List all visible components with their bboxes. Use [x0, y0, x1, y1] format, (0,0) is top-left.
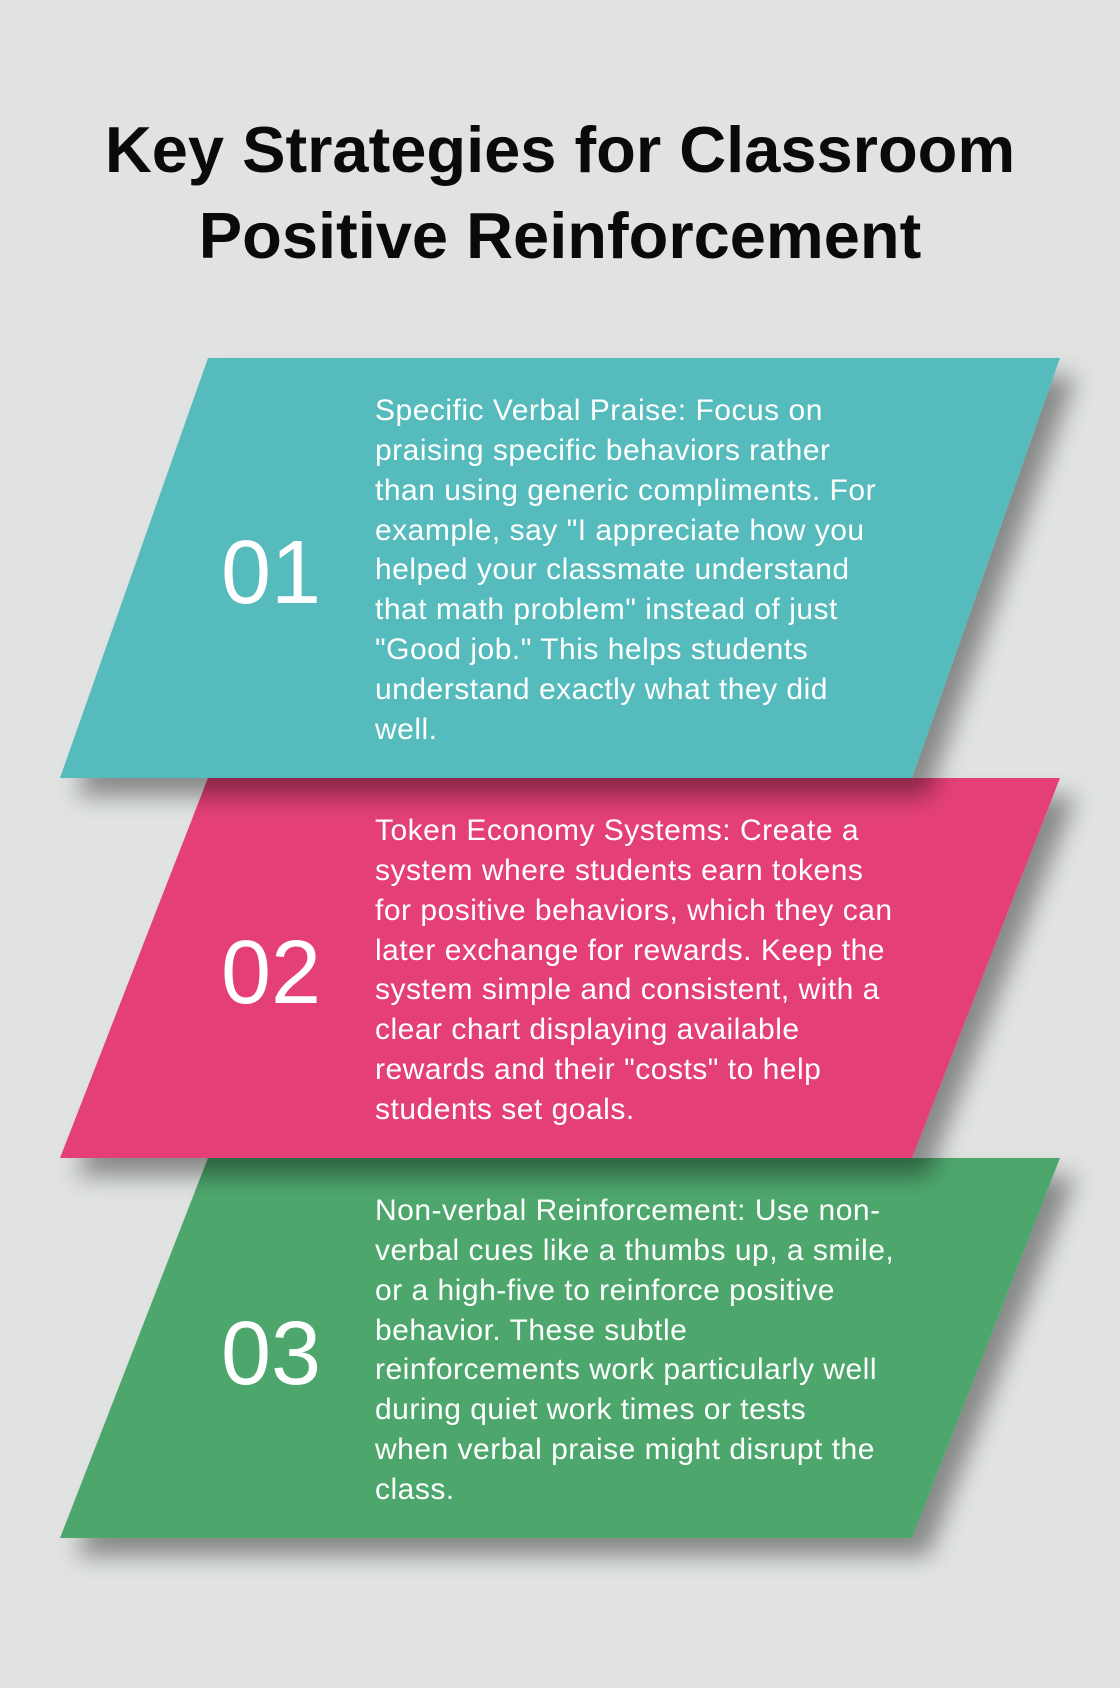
panel 2: token economy — [60, 778, 1060, 1158]
text block 1: than using generic compliments. For — [375, 474, 876, 507]
text block 3: behavior. These subtle — [375, 1314, 687, 1347]
title: Positive Reinforcement — [199, 199, 921, 272]
text block 2: system where students earn tokens — [375, 854, 863, 887]
text block 3: during quiet work times or tests — [375, 1393, 806, 1426]
text block 2: clear chart displaying available — [375, 1013, 800, 1046]
text block 2: system simple and consistent, with a — [375, 973, 880, 1006]
text block 1: helped your classmate understand — [375, 553, 850, 586]
text block 1: understand exactly what they did — [375, 673, 828, 706]
text block 1: "Good job." This helps students — [375, 633, 808, 666]
panel 3: non-verbal reinforcement — [60, 1158, 1060, 1538]
text block 1: well. — [374, 713, 438, 746]
text block 2: later exchange for rewards. Keep the — [375, 934, 885, 967]
text block 3: verbal cues like a thumbs up, a smile, — [375, 1234, 894, 1267]
number 02: 02 — [221, 923, 321, 1023]
text block 3: or a high-five to reinforce positive — [375, 1274, 835, 1307]
number 01: 01 — [221, 523, 321, 623]
text block 1: praising specific behaviors rather — [375, 434, 831, 467]
text block 3 — [374, 1194, 894, 1506]
text block 2 — [375, 814, 893, 1126]
text block 2: for positive behaviors, which they can — [375, 894, 893, 927]
title — [105, 113, 1015, 272]
text block 1: that math problem" instead of just — [375, 593, 838, 626]
title: Key Strategies for Classroom — [105, 113, 1015, 186]
text block 3: class. — [375, 1473, 455, 1506]
text block 2: students set goals. — [375, 1093, 635, 1126]
text block 1 — [374, 394, 876, 746]
text block 1: example, say "I appreciate how you — [375, 514, 865, 547]
text block 3: when verbal praise might disrupt the — [374, 1433, 875, 1466]
text block 3: reinforcements work particularly well — [375, 1353, 877, 1386]
text block 1: Specific Verbal Praise: Focus on — [375, 394, 823, 427]
panel 1: specific verbal praise — [60, 358, 1060, 778]
number 03: 03 — [221, 1304, 321, 1404]
text block 3: Non-verbal Reinforcement: Use non- — [375, 1194, 881, 1227]
text block 2: Token Economy Systems: Create a — [375, 814, 859, 847]
text block 2: rewards and their "costs" to help — [375, 1053, 821, 1086]
